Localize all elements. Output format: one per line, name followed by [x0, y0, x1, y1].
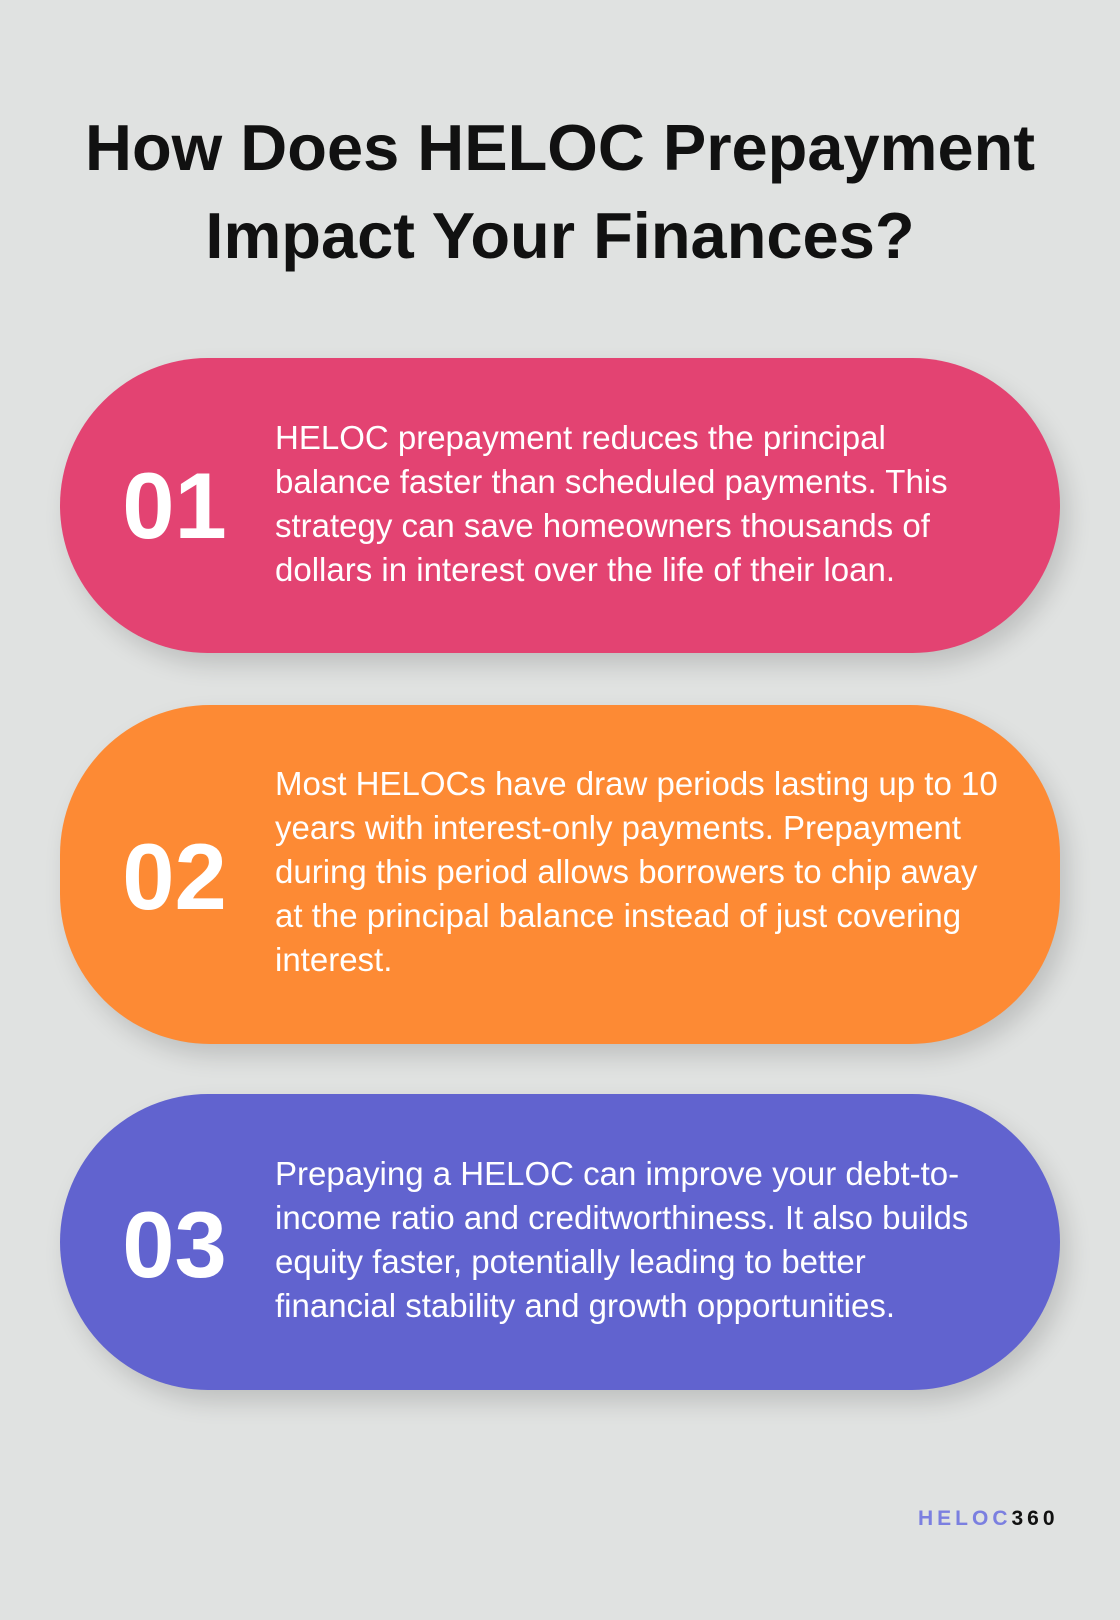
panel: 03 — [60, 1094, 1060, 1390]
text 02: Most HELOCs have draw periods lasting up to 10 years with interest-only payments. Prepayment during this period allows borrowers to chip away at the principal balance instead of just covering interest. — [275, 765, 998, 978]
text 03: Prepaying a HELOC can improve your debt-to-income ratio and creditworthiness. It also builds equity faster, potentially leading to better — [275, 1155, 968, 1280]
number 03: 03 — [122, 1192, 227, 1297]
number 01: 01 — [122, 453, 227, 558]
panel: 02 — [60, 705, 1060, 1044]
number 02: 02 — [122, 824, 227, 929]
title — [85, 111, 1035, 272]
text 01: HELOC prepayment reduces the principal balance faster than scheduled payments. This strategy can save homeowners thousands of dollars in interest over the life of their loan. — [275, 419, 948, 588]
logo: HELOC360 — [918, 1507, 1059, 1530]
title: Impact Your Finances? — [205, 199, 915, 272]
text 03: financial stability and growth opportunities. — [275, 1287, 895, 1324]
panel: 01 — [60, 358, 1060, 653]
title: How Does HELOC Prepayment — [85, 111, 1035, 184]
